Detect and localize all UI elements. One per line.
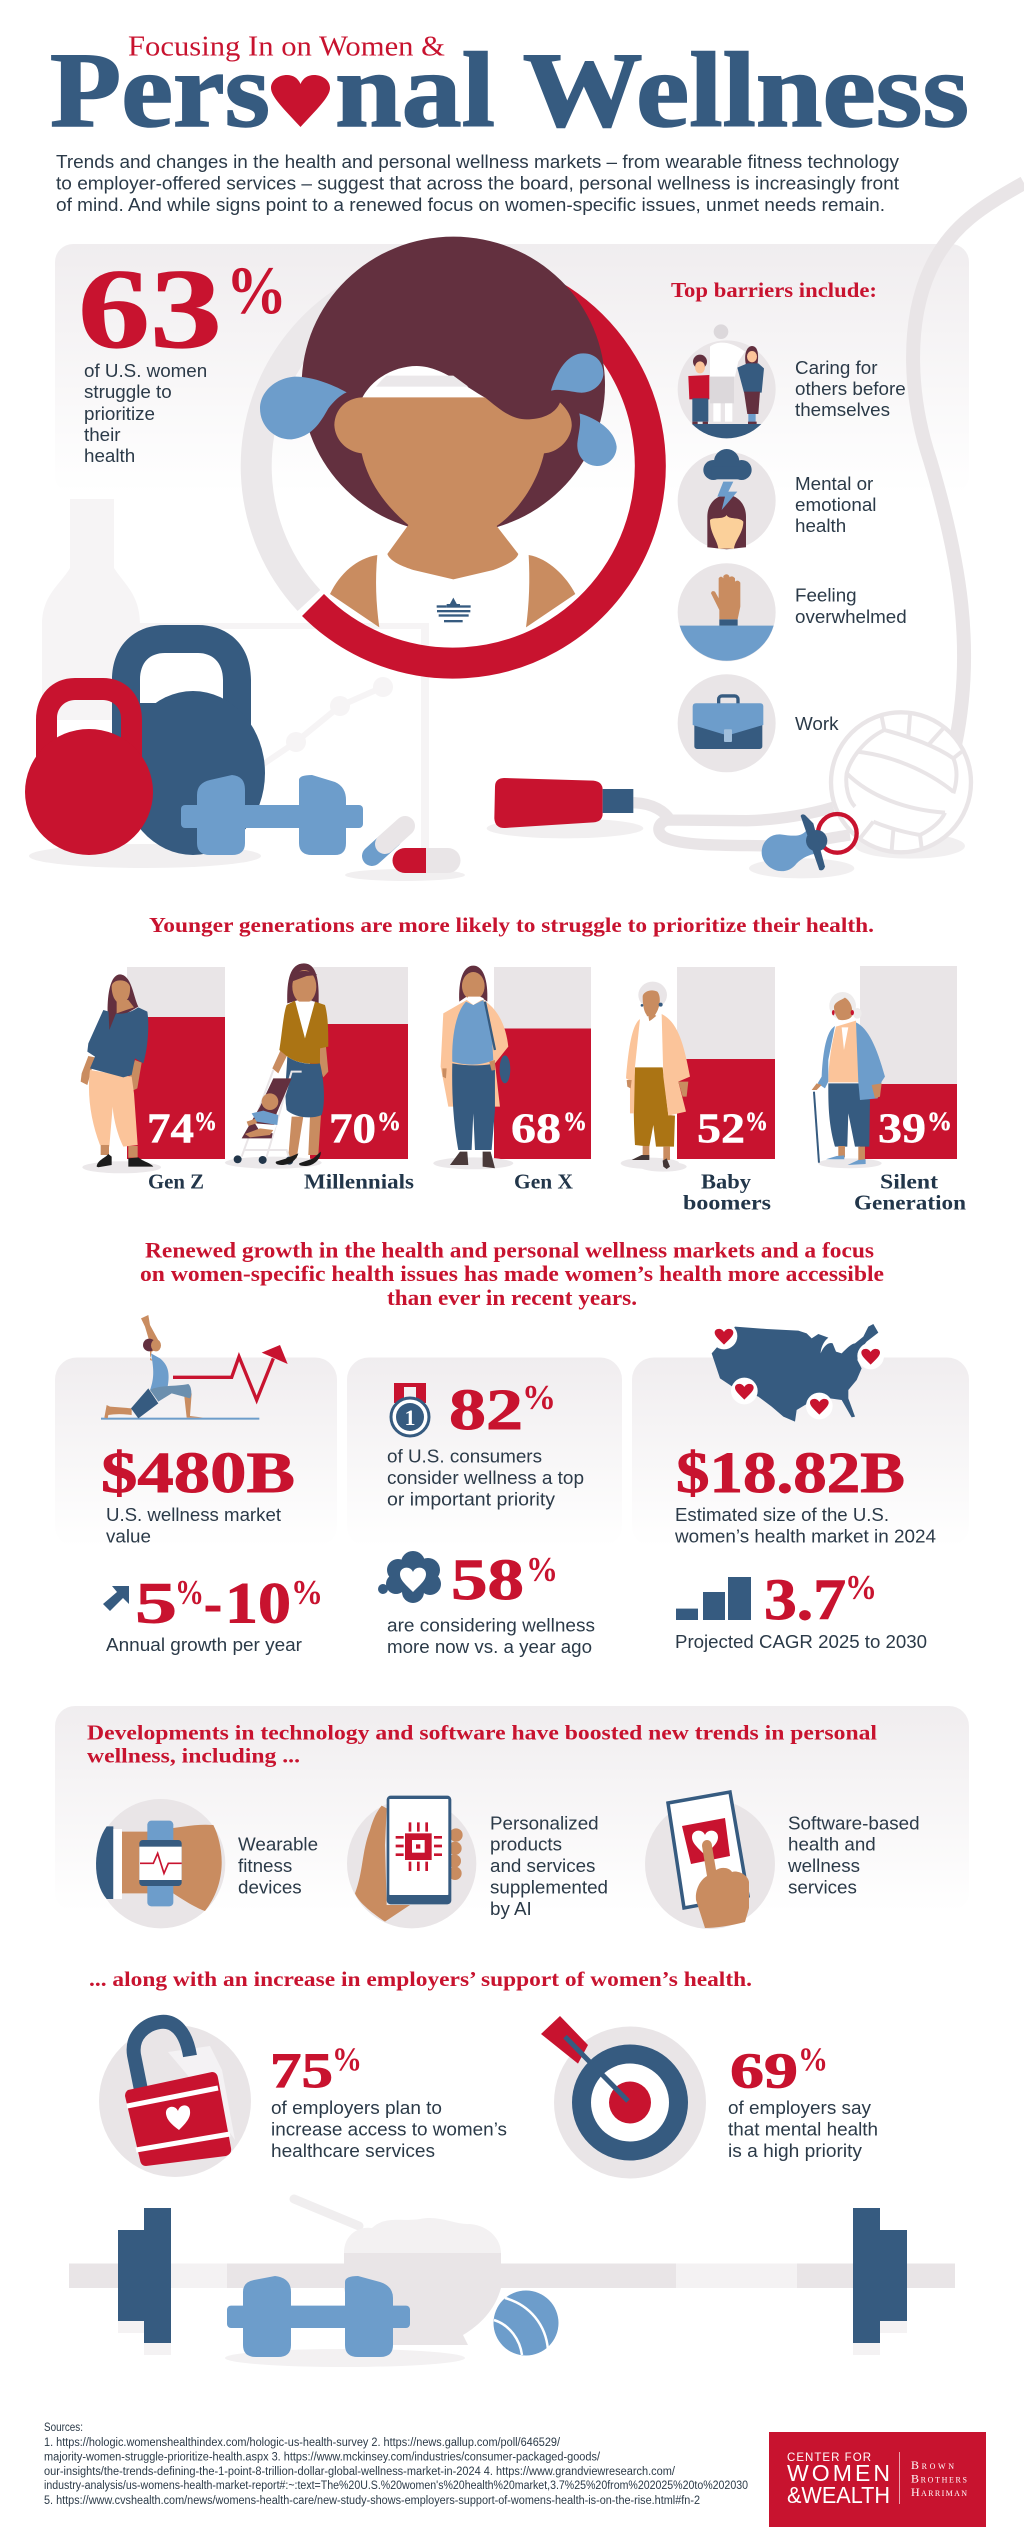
- label 52 percent: 52: [697, 1106, 745, 1152]
- barbell plates left: [118, 2208, 171, 2355]
- panel: technology developments: [55, 1706, 969, 1929]
- rope cord: [633, 803, 850, 846]
- stat: 69 percent: %: [798, 2042, 828, 2079]
- volleyball: [831, 712, 971, 852]
- kettlebell red: [25, 678, 153, 855]
- panel: 63 percent hero: [42, 183, 1024, 858]
- label 52 percent: [697, 1106, 768, 1152]
- rope handle: [494, 778, 603, 828]
- barrier text: mental: Mental or: [795, 473, 873, 494]
- sources: majority-women-struggle-prioritize-health.aspx 3. https://www.mckinsey.com/industries/consumer-packaged-goods/: [44, 2452, 601, 2464]
- bowl with food and spoon: [294, 2199, 501, 2345]
- CAGR description: Projected CAGR 2025 to 2030: [675, 1631, 927, 1652]
- stat: 5 to 10 percent: [135, 1571, 323, 1636]
- stat description: [387, 1615, 595, 1657]
- shirt logo: [437, 598, 471, 622]
- icon: wearable device: [96, 1799, 225, 1928]
- barriers heading: Top barriers include:: [671, 278, 877, 302]
- bottom illustration: barbell, bowl, dumbbell, ball: [69, 2199, 955, 2367]
- stat description: struggle to: [84, 381, 172, 402]
- logo text: Brown Brothers Harriman: Brothers: [911, 2472, 967, 2486]
- shoulder right: [526, 555, 575, 627]
- stat description: more now vs. a year ago: [387, 1636, 592, 1657]
- stat description: is a high priority: [728, 2140, 863, 2161]
- figure: Millennial with stroller: [225, 963, 328, 1169]
- generation names: Baby: [701, 1170, 752, 1194]
- icon: yoga figure with growth arrow: [101, 1315, 288, 1420]
- headband: [362, 366, 485, 398]
- generation names: [148, 1170, 966, 1214]
- stat description: or important priority: [387, 1488, 556, 1510]
- logo text: center for women and wealth: WOMEN: [787, 2460, 890, 2486]
- generation names: Generation: [854, 1190, 966, 1214]
- intro text: [56, 151, 900, 215]
- icon: AI phone: [347, 1796, 476, 1928]
- text: software: [787, 1813, 920, 1897]
- icon: medal: 1: [404, 1405, 416, 1430]
- dumbbell: [227, 2276, 410, 2357]
- stat: 3.7 percent: [764, 1567, 877, 1632]
- barbell plates right: [853, 2208, 907, 2355]
- tennis ball: [494, 2290, 558, 2356]
- kettlebell blue: [112, 625, 265, 855]
- percent labels: [147, 1106, 952, 1152]
- title: [50, 32, 969, 150]
- tear left: [260, 377, 347, 439]
- logo text: Brown Brothers Harriman: Harriman: [911, 2485, 967, 2499]
- stat: 82 percent: %: [522, 1378, 556, 1417]
- icon: briefcase: [678, 674, 776, 772]
- text: software: wellness: [787, 1855, 860, 1876]
- text: wearable: fitness: [238, 1855, 292, 1876]
- icon: overwhelmed hand: [678, 563, 776, 661]
- heading: market growth: than ever in recent years.: [387, 1285, 637, 1310]
- bar: Gen X: [494, 967, 591, 1159]
- label 68 percent: 68: [511, 1106, 561, 1152]
- stat: $480B: $480B: [101, 1440, 295, 1505]
- stat description: are considering wellness: [387, 1615, 595, 1636]
- stat: 5 to 10 percent: 10: [225, 1571, 291, 1636]
- stat: 5 to 10 percent: -: [204, 1571, 222, 1636]
- barrier text: caring: [795, 357, 906, 420]
- icon: up arrow: [103, 1586, 129, 1611]
- stat: 5 to 10 percent: 5: [135, 1571, 177, 1636]
- text: software: services: [788, 1876, 857, 1897]
- label 70 percent: 70: [329, 1106, 376, 1152]
- barrier text: mental: health: [795, 515, 846, 536]
- logo text: Brown Brothers Harriman: [911, 2458, 967, 2499]
- sources: 5. https://www.cvshealth.com/news/womens-health-care/new-study-shows-employers-support-of-womens-health-is-on-the-rise.html#fn-2: [44, 2495, 700, 2507]
- text: personalized: and services: [490, 1855, 595, 1876]
- text: wearable: devices: [238, 1876, 302, 1897]
- logo text: center for women and wealth: [787, 2452, 890, 2508]
- floor shadows: [29, 844, 465, 881]
- tear right top: [551, 353, 603, 393]
- stat description: prioritize: [84, 403, 155, 424]
- figure: Silent Generation woman: [812, 992, 885, 1168]
- label 74 percent: 74: [147, 1106, 194, 1152]
- panel heading: wellness, including ...: [87, 1744, 300, 1768]
- bar: Silent Generation: [860, 966, 957, 1159]
- stat description: that mental health: [728, 2118, 878, 2139]
- stat description: value: [106, 1526, 151, 1547]
- heading: market growth: [140, 1238, 884, 1310]
- stat: 75 percent: %: [332, 2042, 362, 2079]
- label 74 percent: [147, 1106, 217, 1152]
- stat description: of employers say: [728, 2097, 872, 2118]
- icon: heart in title: [271, 75, 330, 127]
- ghost bottle: [42, 499, 140, 720]
- stat: 3.7 percent: %: [845, 1568, 877, 1607]
- sources: [44, 2422, 748, 2507]
- stat: 69 percent: 69: [730, 2042, 798, 2098]
- label 68 percent: %: [563, 1107, 587, 1136]
- woman illustration: [260, 237, 617, 627]
- heading: employers' support: ... along with an increase in employers’ support of women’s health.: [89, 1967, 752, 1991]
- jump rope, volleyball and pacifier: [487, 712, 971, 878]
- logo block: [769, 2432, 986, 2527]
- barrier text: overwhelmed: overwhelmed: [795, 606, 907, 627]
- intro text: to employer-offered services – suggest that across the board, personal wellness is increasingly front: [56, 172, 900, 194]
- barrier text: work: Work: [795, 713, 839, 734]
- panel background: [55, 1706, 969, 1912]
- stat description: of U.S. consumers: [387, 1446, 542, 1467]
- growth description: Annual growth per year: [106, 1634, 302, 1655]
- tear right lower: [577, 413, 617, 466]
- panel: women's health market: [632, 1323, 969, 1652]
- generation names: Silent: [880, 1170, 938, 1194]
- generation names: boomers: [683, 1190, 771, 1214]
- floor shadow: [225, 2349, 465, 2367]
- figure: Gen Z woman: [81, 974, 161, 1173]
- heading: market growth: on women-specific health issues has made women’s health more accessible: [140, 1261, 884, 1286]
- panel background: [632, 1358, 969, 1548]
- stat description: [84, 360, 207, 466]
- text: personalized: supplemented: [490, 1876, 608, 1897]
- equipment illustrations: [25, 625, 971, 881]
- stat description: health: [84, 445, 135, 466]
- ghost frame and chart: [140, 623, 429, 858]
- stat: 3.7 percent: 3.7: [764, 1567, 846, 1632]
- generation names: Millennials: [304, 1170, 414, 1194]
- stat: $18.82B: $18.82B: [676, 1440, 905, 1505]
- bar: Millennials: [310, 967, 408, 1159]
- stat description: [106, 1504, 282, 1547]
- shoulder left: [330, 555, 379, 627]
- icon: software phone: [645, 1792, 775, 1929]
- sources: 1. https://hologic.womenshealthindex.com/hologic-us-health-survey 2. https://news.gallup.com/poll/646529/: [44, 2437, 561, 2449]
- label 52 percent: %: [745, 1107, 768, 1136]
- stat: 82 percent: 82: [449, 1377, 523, 1442]
- dumbbell: [181, 775, 363, 855]
- sources: our-insights/the-trends-defining-the-1-point-8-trillion-dollar-global-wellness-market-in-2024 4. https://www.grandviewresearch.com/: [44, 2466, 676, 2478]
- stat: 82 percent: [449, 1377, 556, 1442]
- logo text: Brown Brothers Harriman: Brown: [911, 2458, 954, 2472]
- bar: Baby boomers: [677, 967, 775, 1159]
- icon: U.S. map with hearts: [711, 1323, 884, 1422]
- stat description: Estimated size of the U.S.: [675, 1504, 889, 1525]
- figure: Baby boomer woman: [621, 982, 690, 1172]
- label 39 percent: [878, 1106, 952, 1152]
- stat description: of employers plan to: [271, 2097, 442, 2118]
- panel background: [55, 244, 969, 494]
- barrier text: caring: Caring for: [795, 357, 877, 378]
- text: personalized: by AI: [490, 1898, 532, 1919]
- stat: 63 percent: 63: [78, 245, 222, 372]
- barrier text: caring: themselves: [795, 399, 890, 420]
- stat: 63 percent: %: [226, 252, 287, 328]
- stat: 58 percent: 58: [451, 1547, 524, 1612]
- panel background: [55, 1358, 337, 1548]
- main title right: nal Wellness: [335, 32, 969, 150]
- stat: 5 to 10 percent: %: [291, 1573, 323, 1612]
- panel heading: [87, 1720, 877, 1768]
- label 39 percent: %: [927, 1107, 952, 1136]
- figure: Gen X woman: [433, 966, 513, 1169]
- stat description: [271, 2097, 507, 2161]
- stat: 75 percent: 75: [270, 2042, 333, 2098]
- generation names: Gen X: [514, 1170, 573, 1194]
- text: personalized: [490, 1813, 608, 1919]
- chart: generations bars: [81, 963, 966, 1214]
- barrier text: caring: others before: [795, 378, 906, 399]
- hair: [302, 237, 605, 533]
- intro text: Trends and changes in the health and personal wellness markets – from wearable fitness technology: [56, 151, 900, 172]
- stat: 58 percent: [451, 1547, 558, 1612]
- heading: market growth: Renewed growth in the health and personal wellness markets and a focus: [145, 1238, 874, 1263]
- stat block: 69 percent employers: [541, 2016, 878, 2178]
- text: personalized: products: [490, 1834, 562, 1855]
- ring grey arc: [256, 269, 552, 600]
- intro text: of mind. And while signs point to a renewed focus on women-specific issues, unmet needs remain.: [56, 194, 885, 215]
- barrier text: mental: emotional: [795, 494, 876, 515]
- icon: heart cloud: [378, 1551, 441, 1603]
- pills: [372, 826, 460, 873]
- shadows: [487, 818, 965, 878]
- stat description: consider wellness a top: [387, 1467, 584, 1488]
- sources: Sources:: [44, 2422, 83, 2434]
- stat description: [674, 1504, 936, 1547]
- face: [334, 397, 572, 579]
- generation names: Gen Z: [148, 1170, 204, 1194]
- stat description: women’s health market in 2024: [674, 1526, 936, 1547]
- text: personalized: Personalized: [490, 1813, 599, 1834]
- stat: 5 to 10 percent: %: [175, 1573, 204, 1612]
- icon: padlock: [99, 2022, 251, 2177]
- stat block: 75 percent employers: [99, 2022, 507, 2177]
- label 70 percent: %: [377, 1107, 401, 1136]
- panel: U.S. wellness market: [55, 1315, 337, 1655]
- stat description: [728, 2097, 878, 2161]
- rope: [913, 183, 1024, 745]
- stat: 75 percent: [270, 2042, 362, 2098]
- heading: generations: Younger generations are more likely to struggle to prioritize their health.: [149, 913, 874, 937]
- ring red arc: [313, 295, 650, 663]
- stat description: healthcare services: [271, 2140, 435, 2161]
- stat description: their: [84, 424, 121, 445]
- main title left: Pers: [50, 32, 270, 150]
- icon: medal: [391, 1383, 429, 1436]
- icon: rising bars: [676, 1577, 751, 1620]
- stat: 69 percent: [730, 2042, 828, 2098]
- logo text: center for women and wealth: &WEALTH: [787, 2482, 890, 2508]
- text: software: Software-based: [788, 1813, 920, 1834]
- barrier text: overwhelmed: Feeling: [795, 585, 857, 606]
- stat description: of U.S. women: [84, 360, 207, 381]
- label 70 percent: [329, 1106, 401, 1152]
- stat description: [387, 1446, 584, 1510]
- icon: mental health: [678, 449, 776, 550]
- label 68 percent: [511, 1106, 587, 1152]
- stat: 63 percent: [78, 245, 287, 372]
- barrier text: mental: [795, 473, 876, 536]
- bar: Gen Z: [127, 967, 225, 1159]
- label 39 percent: 39: [878, 1106, 926, 1152]
- panel background: [347, 1358, 622, 1548]
- label 74 percent: %: [194, 1107, 217, 1136]
- barrier text: overwhelmed: [795, 585, 907, 627]
- pacifier: [818, 814, 857, 853]
- panel heading: Developments in technology and software have boosted new trends in personal: [87, 1720, 877, 1744]
- stat: 58 percent: %: [526, 1550, 558, 1589]
- sources: industry-analysis/us-womens-health-market-report#:~:text=The%20U.S.%20women's%20health%20market,3.7%25%20from%202025%20to%202030: [44, 2480, 748, 2492]
- stat description: U.S. wellness market: [106, 1504, 282, 1525]
- text: wearable: [238, 1834, 318, 1897]
- text: software: health and: [788, 1834, 876, 1855]
- icon: target with arrow: [541, 2016, 706, 2178]
- stat description: increase access to women’s: [271, 2118, 507, 2139]
- logo text: center for women and wealth: CENTER FOR: [787, 2452, 871, 2464]
- panel: consumer priority: [347, 1358, 622, 1657]
- icon: caring for others: [678, 324, 776, 438]
- subtitle: Focusing In on Women &: [128, 32, 445, 63]
- text: wearable: Wearable: [238, 1834, 318, 1855]
- barbell bar: [69, 2264, 955, 2288]
